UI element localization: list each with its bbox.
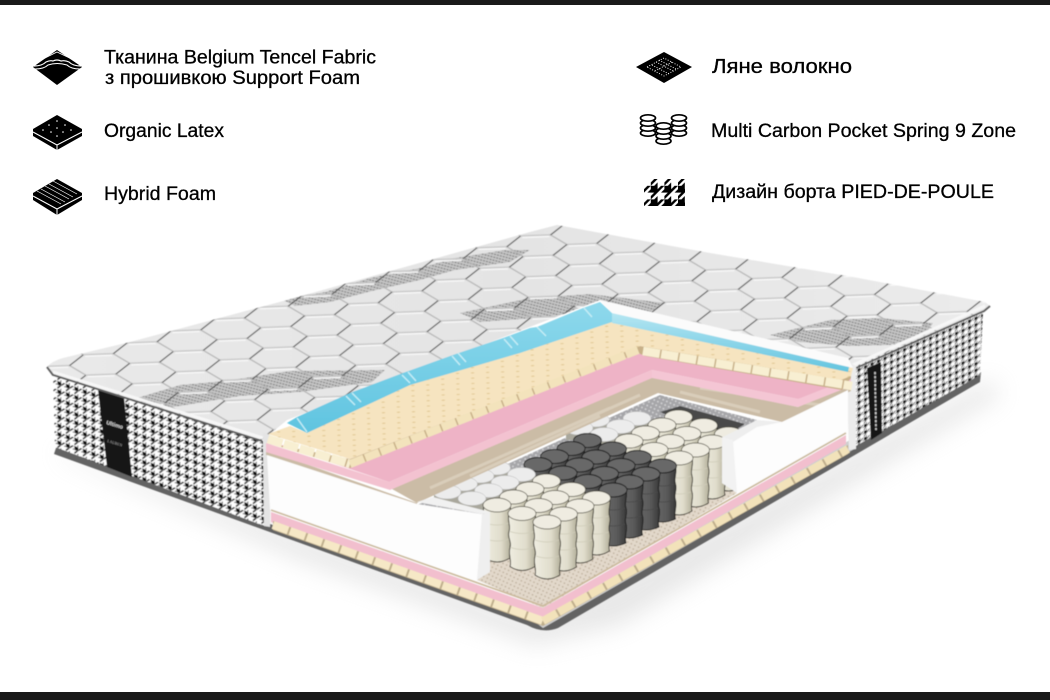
side label: left: LAUREN	[107, 439, 123, 448]
text: fabric line two: з прошивкою Support Foam	[105, 68, 360, 89]
gray felt under springs	[417, 395, 757, 530]
icon: hybrid foam	[33, 179, 82, 215]
dark springs back row	[660, 406, 745, 438]
icon: organic latex	[33, 115, 82, 150]
top quilted cover	[40, 220, 1000, 450]
tan strip lower	[271, 433, 846, 606]
knit patches	[137, 250, 933, 410]
piping edges	[47, 306, 990, 441]
side panel: right houndstooth	[854, 310, 983, 447]
cover side band: left	[263, 432, 272, 527]
white cover strip	[600, 300, 853, 368]
side panel: left houndstooth	[53, 375, 264, 526]
text: linen fibre: Ляне волокно	[712, 56, 852, 78]
thin tan strip	[266, 450, 417, 506]
white foam block: left	[267, 455, 490, 580]
cover side band: right	[846, 360, 856, 450]
gap under lower layers	[270, 440, 856, 628]
icon: pocket springs	[640, 115, 686, 144]
mattress cutaway illustration	[40, 220, 1000, 630]
icon: houndstooth border	[644, 179, 685, 206]
pocket springs	[433, 410, 742, 579]
white foam block: right	[722, 390, 848, 493]
icon: linen fibre	[636, 52, 692, 83]
latex: lower	[273, 445, 848, 626]
felt layer	[392, 376, 851, 503]
floor shadow	[60, 380, 1000, 645]
blue gel foam	[287, 302, 850, 433]
bottom bar	[0, 692, 1050, 700]
pink foam: lower	[271, 435, 846, 617]
side label: right	[867, 362, 882, 440]
text: hybrid foam: Hybrid Foam	[104, 184, 216, 205]
text: pocket springs: Multi Carbon Pocket Spring 9 Zone	[711, 121, 1016, 142]
floor mesh	[477, 480, 737, 608]
icon: fabric with support foam	[33, 50, 82, 85]
side label: left	[98, 390, 132, 477]
side label: left: Ultimo	[105, 420, 124, 431]
legend: layers and materials	[33, 48, 1016, 215]
top bar	[0, 0, 1050, 5]
pink comfort foam: upper	[266, 347, 851, 490]
base plinth	[54, 372, 981, 630]
text: border design: Дизайн борта PIED-DE-POULE	[712, 182, 994, 203]
latex layer	[268, 320, 853, 468]
text: fabric line one: Тканина Belgium Tencel Fabric	[104, 48, 376, 68]
text: organic latex: Organic Latex	[104, 121, 224, 142]
